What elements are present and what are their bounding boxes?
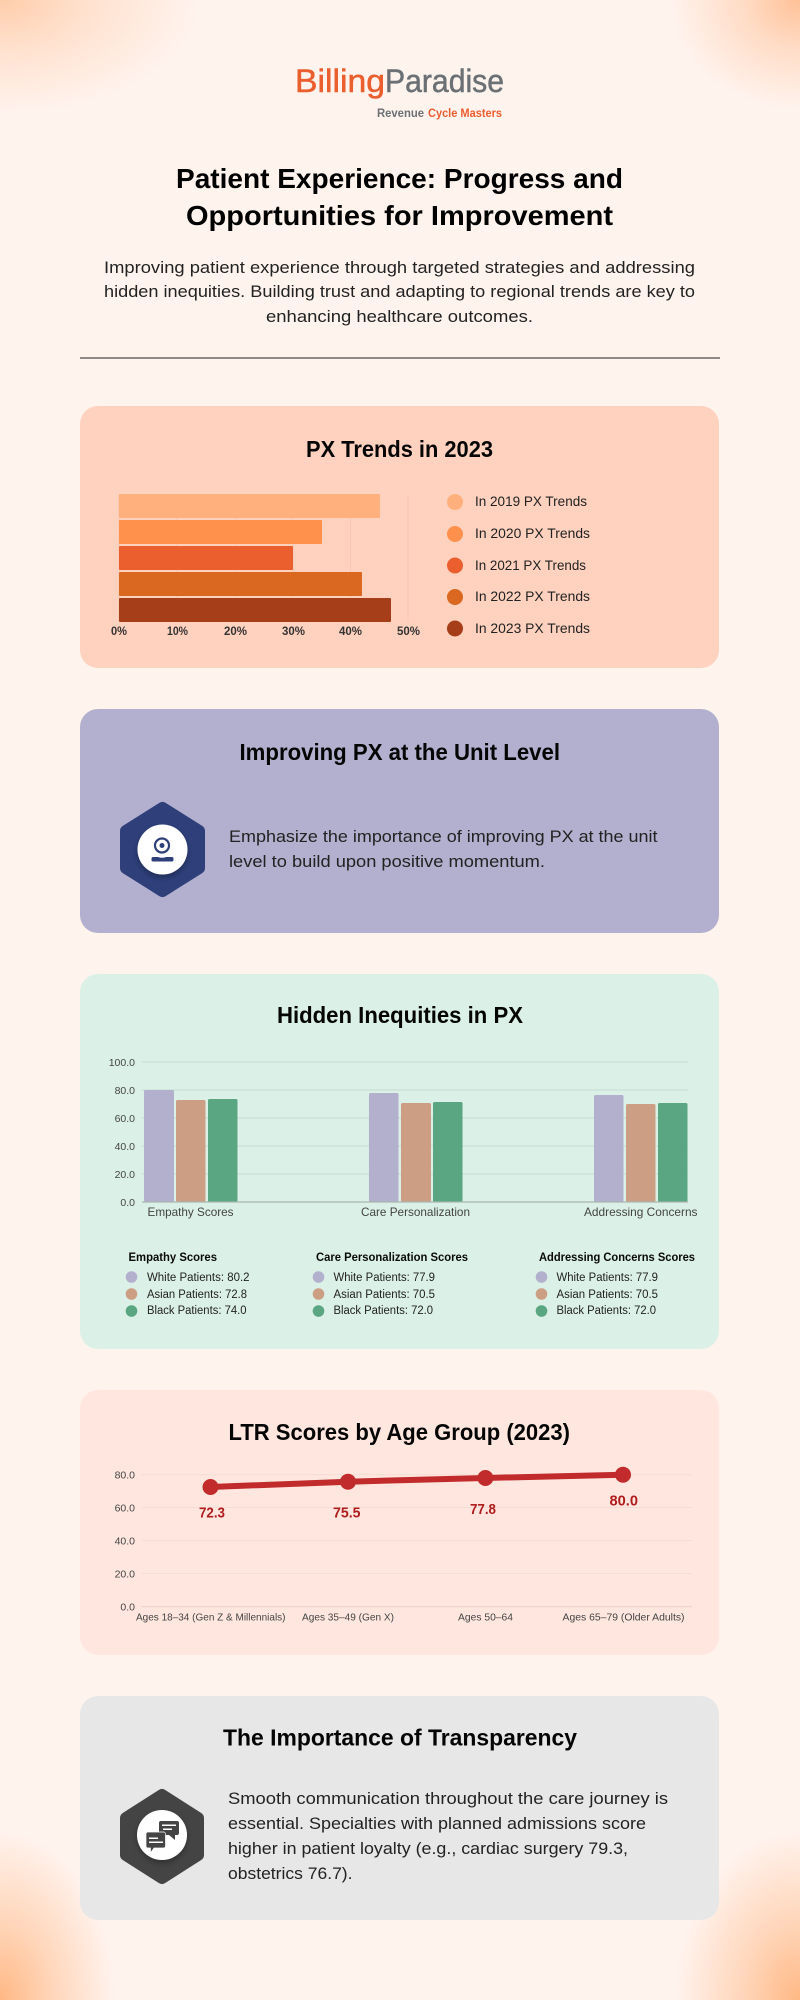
body text: level to build upon positive momentum. xyxy=(229,852,545,871)
panel: Hidden Inequities in PX xyxy=(80,974,719,1349)
heading: The Importance of Transparency xyxy=(223,1725,577,1751)
title xyxy=(176,163,623,231)
legend: Care Personalization Scores: Care Personalization Scores xyxy=(316,1252,468,1264)
horizontal bar chart: 0% xyxy=(111,626,127,638)
logo: BillingParadise: Cycle Masters xyxy=(428,106,502,120)
heading: LTR Scores by Age Group (2023) xyxy=(228,1419,570,1445)
icon: chat bubbles in hexagon xyxy=(126,1795,198,1878)
panel: Improving PX at the Unit Level xyxy=(80,709,719,933)
panel background xyxy=(80,1696,719,1920)
logo: BillingParadise: Billing xyxy=(295,63,385,99)
legend: In 2023 PX Trends xyxy=(475,620,590,636)
grouped bar chart: 0.0 xyxy=(120,1197,135,1209)
line chart: 60.0 xyxy=(115,1502,135,1514)
icon: webcam in hexagon xyxy=(126,808,199,891)
legend: Addressing Concerns Scores: Asian Patients: 70.5 xyxy=(556,1289,658,1301)
line chart: Ages 65–79 (Older Adults) xyxy=(562,1612,684,1624)
horizontal bar chart xyxy=(111,494,420,638)
logo: BillingParadise: Paradise xyxy=(385,63,504,99)
legend: Addressing Concerns Scores: White Patients: 77.9 xyxy=(556,1272,658,1284)
legend: In 2021 PX Trends xyxy=(475,557,586,573)
grouped bar chart: 20.0 xyxy=(115,1169,135,1181)
panel background xyxy=(80,974,719,1349)
title: Opportunities for Improvement xyxy=(186,200,613,231)
grouped bar chart: 40.0 xyxy=(115,1141,135,1153)
grouped bar chart: 80.0 xyxy=(115,1085,135,1097)
body text: Emphasize the importance of improving PX at the unit xyxy=(229,827,658,846)
grouped bar chart: Empathy Scores xyxy=(148,1205,234,1219)
line chart: 20.0 xyxy=(115,1568,135,1580)
line chart: Ages 35–49 (Gen X) xyxy=(302,1612,394,1624)
legend: In 2022 PX Trends xyxy=(475,588,590,604)
panel background xyxy=(80,406,719,668)
legend: Empathy Scores: Black Patients: 74.0 xyxy=(147,1305,246,1317)
legend: Care Personalization Scores xyxy=(313,1252,468,1317)
heading: Hidden Inequities in PX xyxy=(277,1002,524,1028)
body text: obstetrics 76.7). xyxy=(228,1864,352,1883)
panel: PX Trends in 2023 xyxy=(80,406,719,668)
panel background xyxy=(80,709,719,933)
logo: BillingParadise: Revenue xyxy=(377,106,424,120)
legend: Empathy Scores: White Patients: 80.2 xyxy=(147,1272,250,1284)
line chart: 80.0 xyxy=(610,1494,638,1510)
horizontal bar chart: 10% xyxy=(167,626,188,638)
horizontal bar chart: 20% xyxy=(224,626,247,638)
line chart: 80.0 xyxy=(115,1470,135,1482)
line chart: 75.5 xyxy=(333,1506,360,1522)
legend: Empathy Scores xyxy=(126,1252,250,1317)
panel: The Importance of Transparency xyxy=(80,1696,719,1920)
body text xyxy=(229,827,658,871)
legend: In 2019 PX Trends xyxy=(475,493,587,509)
panel: LTR Scores by Age Group (2023) xyxy=(80,1390,719,1655)
horizontal bar chart: 40% xyxy=(339,626,362,638)
panel background xyxy=(80,1390,719,1655)
legend: Empathy Scores: Empathy Scores xyxy=(128,1252,217,1264)
subtitle text block xyxy=(104,258,695,326)
grouped bar chart: Care Personalization xyxy=(361,1205,470,1219)
legend: Addressing Concerns Scores: Black Patients: 72.0 xyxy=(556,1305,656,1317)
subtitle text block: Improving patient experience through targeted strategies and addressing xyxy=(104,258,695,277)
line chart: Ages 18–34 (Gen Z & Millennials) xyxy=(136,1612,286,1624)
subtitle text block: hidden inequities. Building trust and adapting to regional trends are key to xyxy=(104,282,695,301)
legend: Care Personalization Scores: Black Patients: 72.0 xyxy=(334,1305,433,1317)
legend: Care Personalization Scores: White Patients: 77.9 xyxy=(334,1272,435,1284)
legend: Care Personalization Scores: Asian Patients: 70.5 xyxy=(334,1289,435,1301)
legend: Addressing Concerns Scores: Addressing Concerns Scores xyxy=(539,1252,695,1264)
body text: Smooth communication throughout the care journey is xyxy=(228,1789,668,1808)
grouped bar chart xyxy=(109,1057,698,1219)
logo: BillingParadise xyxy=(295,63,504,120)
horizontal bar chart: 50% xyxy=(397,626,420,638)
body text xyxy=(228,1789,668,1883)
body text: higher in patient loyalty (e.g., cardiac surgery 79.3, xyxy=(228,1839,628,1858)
title: Patient Experience: Progress and xyxy=(176,163,623,194)
legend: Empathy Scores: Asian Patients: 72.8 xyxy=(147,1289,247,1301)
legend xyxy=(447,493,590,636)
grouped bar chart: Addressing Concerns xyxy=(584,1205,698,1219)
line chart xyxy=(115,1467,692,1624)
body text: essential. Specialties with planned admissions score xyxy=(228,1814,646,1833)
line chart: Ages 50–64 xyxy=(458,1612,513,1624)
legend: In 2020 PX Trends xyxy=(475,525,590,541)
subtitle text block: enhancing healthcare outcomes. xyxy=(266,307,533,326)
heading: Improving PX at the Unit Level xyxy=(240,739,560,765)
heading: PX Trends in 2023 xyxy=(306,436,493,462)
grouped bar chart: 60.0 xyxy=(115,1113,135,1125)
line chart: 0.0 xyxy=(120,1602,135,1614)
line chart: 40.0 xyxy=(115,1536,135,1548)
line chart: 72.3 xyxy=(199,1506,225,1522)
grouped bar chart: 100.0 xyxy=(109,1057,135,1069)
horizontal bar chart: 30% xyxy=(282,626,305,638)
line chart: 77.8 xyxy=(470,1502,496,1518)
legend: Addressing Concerns Scores xyxy=(536,1252,695,1317)
